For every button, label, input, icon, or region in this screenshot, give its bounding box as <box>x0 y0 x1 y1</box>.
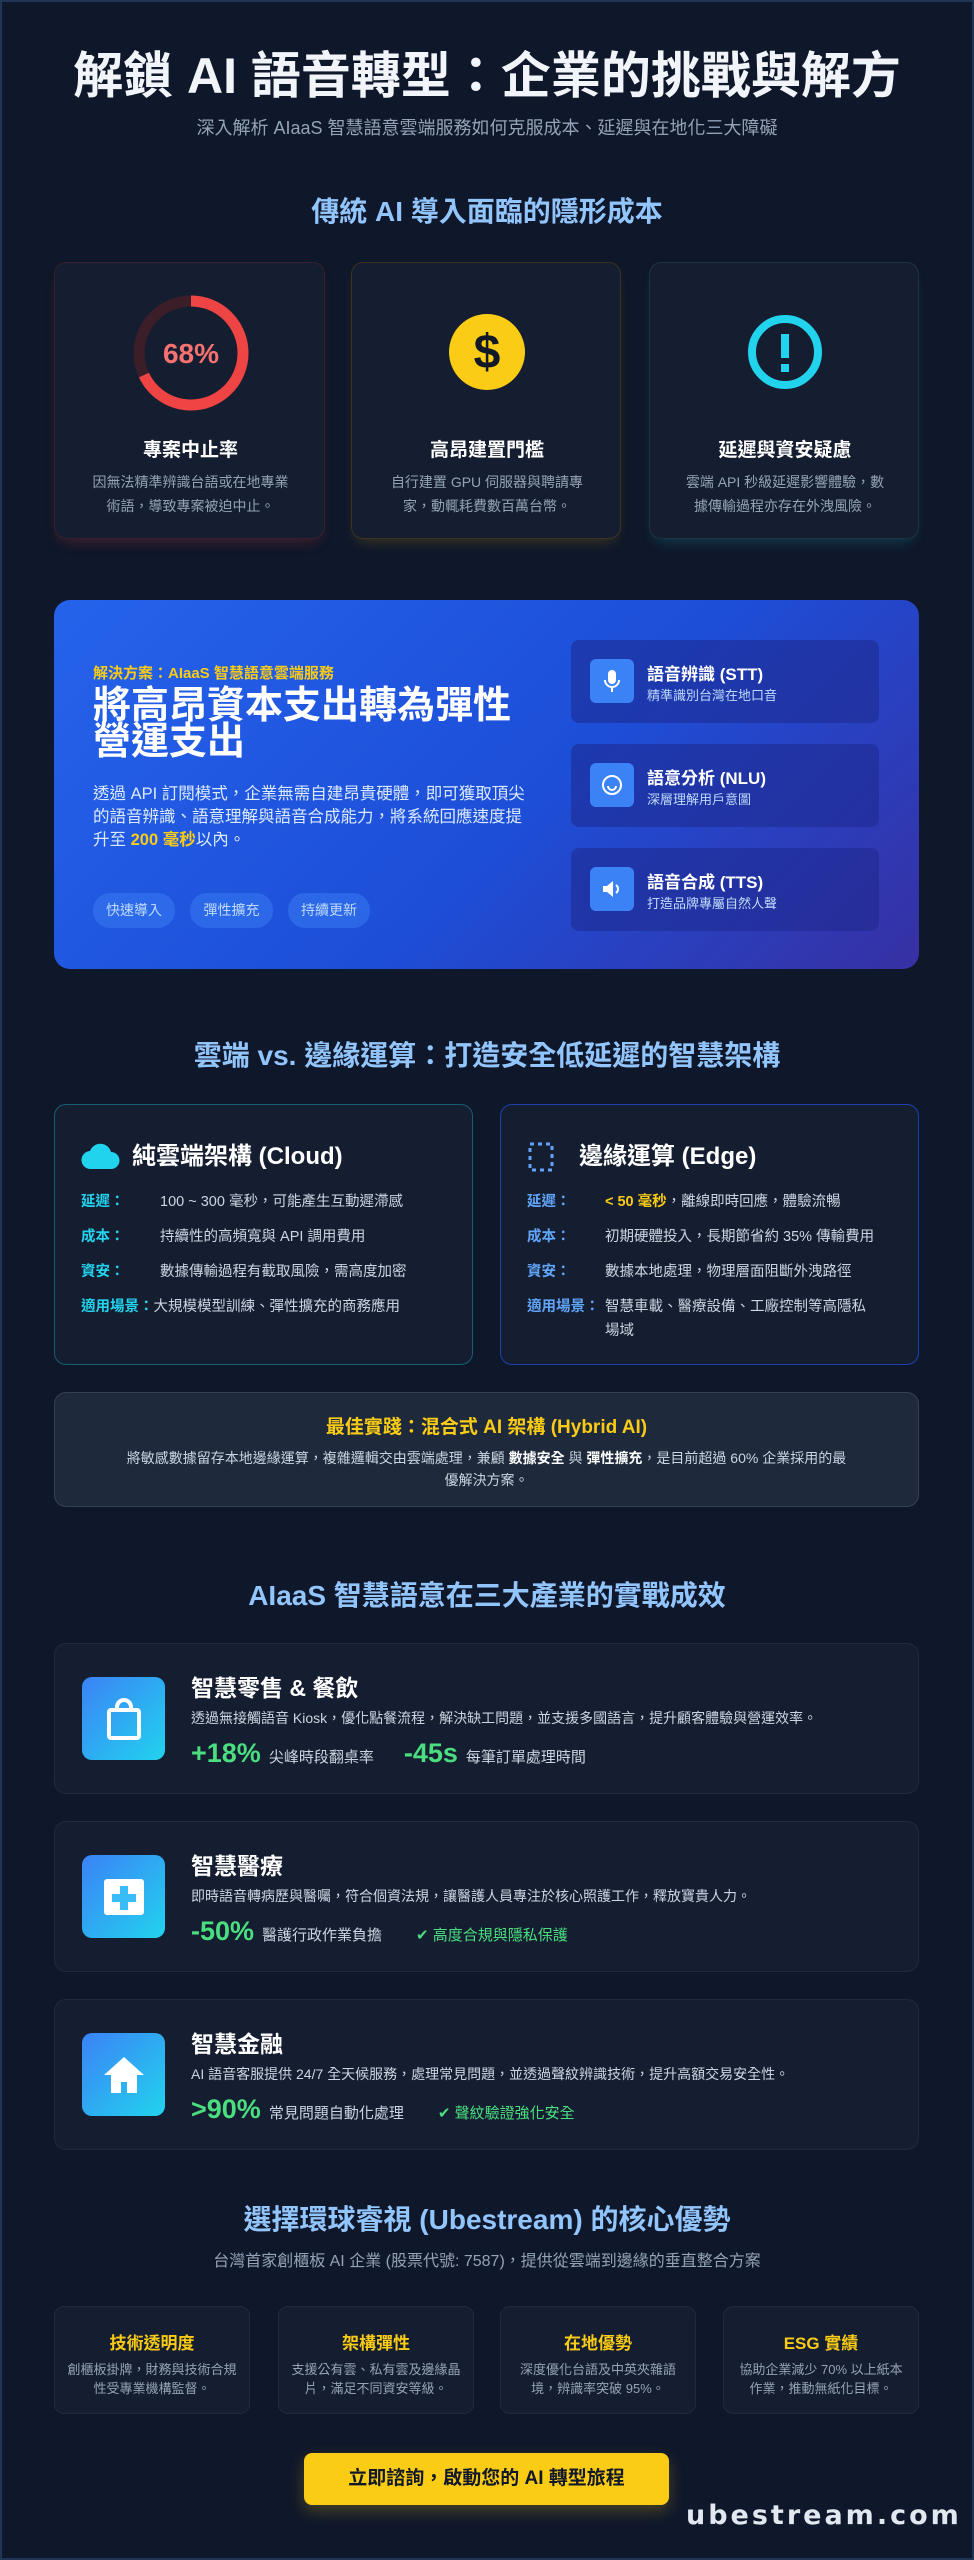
panel: retail: 尖峰時段翻桌率 每筆訂單處理時間 <box>269 1749 586 1766</box>
panel: retail: +18% <box>191 1738 261 1768</box>
service: NLU: 深層理解用戶意圖 <box>647 792 751 807</box>
panel: abort rate: 專案中止率 <box>143 440 238 461</box>
panel: finance: 智慧金融 <box>191 2031 283 2057</box>
panel: edge: 數據本地處理，物理層面阻斷外洩路徑 <box>605 1264 852 1280</box>
panel: edge: 智慧車載、醫療設備、工廠控制等高隱私場域 <box>605 1299 866 1339</box>
solution headline: 將高昂資本支出轉為彈性 <box>93 685 511 727</box>
heading: industries: AIaaS 智慧語意在三大產業的實戰成效 <box>248 1580 726 1611</box>
icon: cloud <box>82 1144 120 1169</box>
panel: cloud <box>54 1104 473 1365</box>
panel: retail <box>54 1643 919 1794</box>
icon: chip <box>528 1142 554 1172</box>
panel: medical: ✔ 高度合規與隱私保護 <box>416 1927 568 1944</box>
icon: bag <box>82 1677 165 1760</box>
advantage cards: 支援公有雲、私有雲及邊緣晶片，滿足不同資安等級。 <box>291 2362 460 2396</box>
panel: finance: ✔ 聲紋驗證強化安全 <box>438 2105 575 2122</box>
advantage cards: ESG 實績 <box>784 2334 858 2353</box>
advantage cards: 在地優勢 <box>564 2334 632 2353</box>
subtitle: 深入解析 AIaaS 智慧語意雲端服務如何克服成本、延遲與在地化三大障礙 <box>196 118 778 138</box>
callout: hybrid AI: 最佳實踐：混合式 AI 架構 (Hybrid AI) <box>326 1417 647 1438</box>
service: TTS: 打造品牌專屬自然人聲 <box>647 896 777 911</box>
panel: latency & security: 據傳輸過程亦存在外洩風險。 <box>694 498 876 514</box>
panel: cloud: 持續性的高頻寬與 API 調用費用 <box>160 1229 365 1245</box>
heading: cloud vs edge: 雲端 vs. 邊緣運算：打造安全低延遲的智慧架構 <box>194 1040 780 1071</box>
icon: home <box>82 2033 165 2116</box>
panel: edge: 延遲： <box>527 1194 570 1210</box>
panel: finance: >90% <box>191 2094 261 2124</box>
panel: cloud: 100 ~ 300 毫秒，可能產生互動遲滯感 <box>160 1194 403 1210</box>
panel: latency & security: 雲端 API 秒級延遲影響體驗，數 <box>686 474 884 490</box>
panel: medical: -50% <box>191 1916 254 1946</box>
panel: abort rate: 術語，導致專案被迫中止。 <box>106 498 274 514</box>
callout: hybrid AI <box>54 1392 919 1507</box>
icon: 68% ring: 68% <box>163 338 219 369</box>
callout: hybrid AI: 將敏感數據留存本地邊緣運算，複雜邏輯交由雲端處理，兼顧 數據安全 與 彈性擴充，是目前超過 60% 企業採用的最優解決方案。 <box>127 1450 846 1488</box>
icon: dollar <box>449 314 525 390</box>
panel: abort rate <box>54 262 325 539</box>
panel: cloud: 數據傳輸過程有截取風險，需高度加密 <box>160 1264 406 1280</box>
panel: finance: 常見問題自動化處理 <box>269 2105 404 2122</box>
panel: medical: 智慧醫療 <box>191 1853 283 1879</box>
panel: latency & security: 延遲與資安疑慮 <box>718 440 852 461</box>
service: STT: 語音辨識 (STT) <box>647 665 763 684</box>
icon: alert <box>748 315 822 389</box>
panel: solution <box>54 600 919 969</box>
solution body: 透過 API 訂閱模式，企業無需自建昂貴硬體，即可獲取頂尖的語音辨識、語意理解與語音合成能力，將系統回應速度提升至 200 毫秒以內。 <box>93 785 525 849</box>
CTA button <box>304 2453 669 2505</box>
heading: advantages: 選擇環球睿視 (Ubestream) 的核心優勢 <box>244 2204 730 2235</box>
panel: edge: 邊緣運算 (Edge) <box>579 1143 756 1170</box>
panel: medical <box>54 1821 919 1972</box>
footer url: ubestream.com <box>686 2500 962 2531</box>
advantage cards: 架構彈性 <box>342 2334 410 2353</box>
panel: medical: 醫護行政作業負擔 <box>262 1927 382 1944</box>
panel: edge <box>500 1104 919 1365</box>
solution headline: 營運支出 <box>93 721 245 763</box>
panel: cloud: 適用場景：大規模模型訓練、彈性擴充的商務應用 <box>81 1299 400 1315</box>
heading: hidden costs: 傳統 AI 導入面臨的隱形成本 <box>311 196 663 227</box>
panel: build cost: 高昂建置門檻 <box>430 440 544 461</box>
icon: medical <box>82 1855 165 1938</box>
panel: retail: 智慧零售 & 餐飲 <box>191 1675 358 1701</box>
panel: edge: < 50 毫秒，離線即時回應，體驗流暢 <box>605 1194 841 1210</box>
panel: edge: 成本： <box>527 1229 570 1245</box>
advantage cards: 深度優化台語及中英夾雜語境，辨識率突破 95%。 <box>520 2362 676 2396</box>
service: TTS: 語音合成 (TTS) <box>647 873 763 892</box>
solution label: 解決方案：AIaaS 智慧語意雲端服務 <box>93 665 334 682</box>
panel: build cost <box>351 262 621 539</box>
panel: finance <box>54 1999 919 2150</box>
service: TTS <box>571 848 879 931</box>
panel: cloud: 純雲端架構 (Cloud) <box>132 1143 343 1170</box>
chips: 持續更新 <box>301 902 357 918</box>
panel: retail: 透過無接觸語音 Kiosk，優化點餐流程，解決缺工問題，並支援多國語言，提升顧客體驗與營運效率。 <box>191 1710 817 1726</box>
advantage cards: 技術透明度 <box>110 2334 194 2353</box>
icon: dollar: $ <box>474 326 501 379</box>
advantages subtitle: 台灣首家創櫃板 AI 企業 (股票代號: 7587)，提供從雲端到邊緣的垂直整合方案 <box>213 2253 761 2270</box>
service: STT: 精準識別台灣在地口音 <box>647 688 777 703</box>
panel: edge: 資安： <box>527 1264 570 1280</box>
service: NLU: 語意分析 (NLU) <box>647 769 766 788</box>
panel: latency & security <box>649 262 919 539</box>
panel: edge: 初期硬體投入，長期節省約 35% 傳輸費用 <box>605 1229 874 1245</box>
panel: build cost: 家，動輒耗費數百萬台幣。 <box>403 498 571 514</box>
chips <box>93 893 370 928</box>
panel: cloud: 成本： <box>81 1229 124 1245</box>
chips: 彈性擴充 <box>204 902 260 918</box>
title: 解鎖 AI 語音轉型：企業的挑戰與解方 <box>73 48 901 104</box>
advantage cards: 協助企業減少 70% 以上紙本作業，推動無紙化目標。 <box>739 2362 903 2396</box>
panel: edge: 適用場景： <box>527 1299 600 1315</box>
panel: finance: AI 語音客服提供 24/7 全天候服務，處理常見問題，並透過聲紋辨識技術，提升高額交易安全性。 <box>191 2066 789 2082</box>
chips: 快速導入 <box>106 902 162 918</box>
CTA button: 立即諮詢，啟動您的 AI 轉型旅程 <box>348 2468 625 2489</box>
service: STT <box>571 640 879 723</box>
panel: abort rate: 因無法精準辨識台語或在地專業 <box>92 474 288 490</box>
solution headline <box>93 685 511 763</box>
service: NLU <box>571 744 879 827</box>
panel: cloud: 資安： <box>81 1264 124 1280</box>
panel: cloud: 延遲： <box>81 1194 124 1210</box>
panel: medical: 即時語音轉病歷與醫囑，符合個資法規，讓醫護人員專注於核心照護工作，釋放寶貴人力。 <box>191 1888 751 1904</box>
advantage cards: 創櫃板掛牌，財務與技術合規性受專業機構監督。 <box>67 2362 236 2396</box>
icon: 68% ring <box>134 296 248 410</box>
panel: build cost: 自行建置 GPU 伺服器與聘請專 <box>391 474 583 490</box>
panel: retail: -45s <box>404 1738 458 1768</box>
